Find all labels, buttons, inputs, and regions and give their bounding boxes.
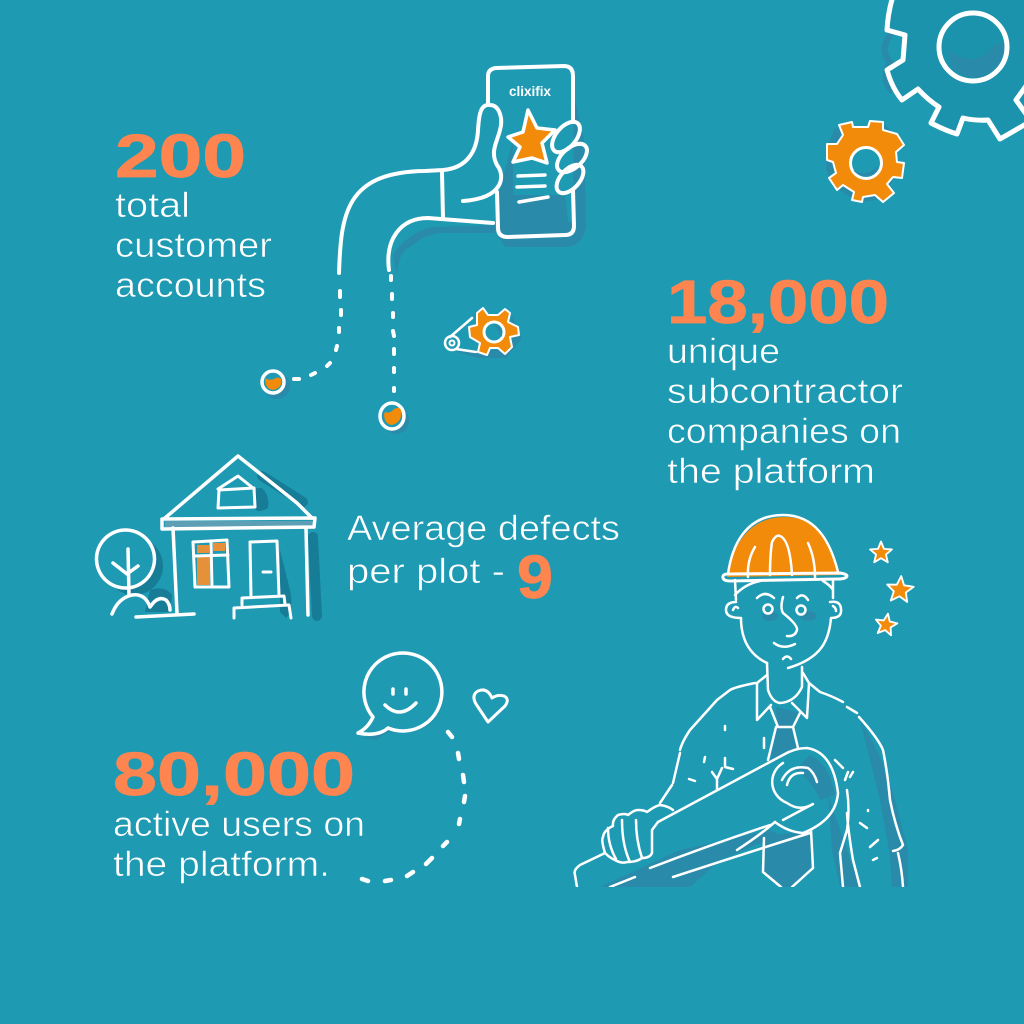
heading: 200 total customer accounts: 200 xyxy=(115,122,246,190)
heading: 200 total customer accounts: customer xyxy=(115,226,272,265)
walls and ground xyxy=(136,528,308,617)
dashed path around 80,000 xyxy=(362,732,465,881)
heading: 80,000 active users xyxy=(113,740,365,884)
icon: small gear with belt xyxy=(445,308,522,358)
heading: 200 total customer accounts: accounts xyxy=(115,266,266,305)
heading: 200 total customer accounts: total xyxy=(115,186,190,225)
icon: hand holding phone with star xyxy=(339,66,592,277)
phone shadow xyxy=(498,95,586,247)
heading: 18,000 subcontractor companies: the platform xyxy=(667,452,875,491)
eyes xyxy=(764,604,806,614)
star rating xyxy=(508,110,555,163)
app logo: clixifix xyxy=(509,83,551,99)
neck and collar xyxy=(757,663,809,720)
left pin xyxy=(262,371,290,399)
phone text lines xyxy=(517,175,548,202)
illustration: construction worker with blueprint roll xyxy=(575,515,908,887)
heading: 18,000 subcontractor companies xyxy=(667,268,903,491)
bush xyxy=(112,595,170,614)
icon: house with tree xyxy=(96,456,317,618)
hand and sleeve xyxy=(575,805,673,887)
icon: heart xyxy=(474,690,507,722)
heading: 200 total customer accounts xyxy=(115,122,272,305)
worker shadows xyxy=(770,707,800,760)
arm and thumb xyxy=(339,105,501,273)
heading: 18,000 subcontractor companies: unique xyxy=(667,332,780,371)
shirt creases xyxy=(689,726,878,860)
text: average defects per plot xyxy=(347,509,620,611)
face xyxy=(726,579,841,668)
heading: 80,000 active users: active users on xyxy=(113,805,365,844)
lower pin xyxy=(380,403,409,434)
door and steps xyxy=(234,541,291,618)
orange gear, top right xyxy=(826,121,904,202)
house shadows xyxy=(262,476,303,502)
text: average defects per plot: 9 xyxy=(517,543,553,611)
phone outline xyxy=(488,66,574,237)
tie xyxy=(763,707,813,887)
icon: three orange stars xyxy=(870,542,914,636)
blueprint roll xyxy=(610,748,838,887)
dashed path to lower pin xyxy=(391,276,394,391)
heading: 18,000 subcontractor companies: 18,000 xyxy=(667,268,889,336)
roof xyxy=(162,456,315,529)
fingers xyxy=(547,117,585,157)
icon: chat bubble with smile xyxy=(358,653,444,740)
large gear, top right xyxy=(885,0,1024,139)
text: average defects per plot: Average defects xyxy=(347,509,620,548)
heading: 80,000 active users: 80,000 xyxy=(113,740,355,808)
text: average defects per plot: per plot - xyxy=(347,552,505,591)
dormer xyxy=(218,476,255,508)
torso xyxy=(660,683,903,887)
dashed path to left pin xyxy=(294,291,341,379)
heading: 80,000 active users: the platform. xyxy=(113,845,330,884)
tree xyxy=(96,530,154,595)
hard hat xyxy=(723,515,847,581)
window xyxy=(193,540,229,587)
heading: 18,000 subcontractor companies: subcontractor xyxy=(667,372,903,411)
heading: 18,000 subcontractor companies: companies on xyxy=(667,412,901,451)
